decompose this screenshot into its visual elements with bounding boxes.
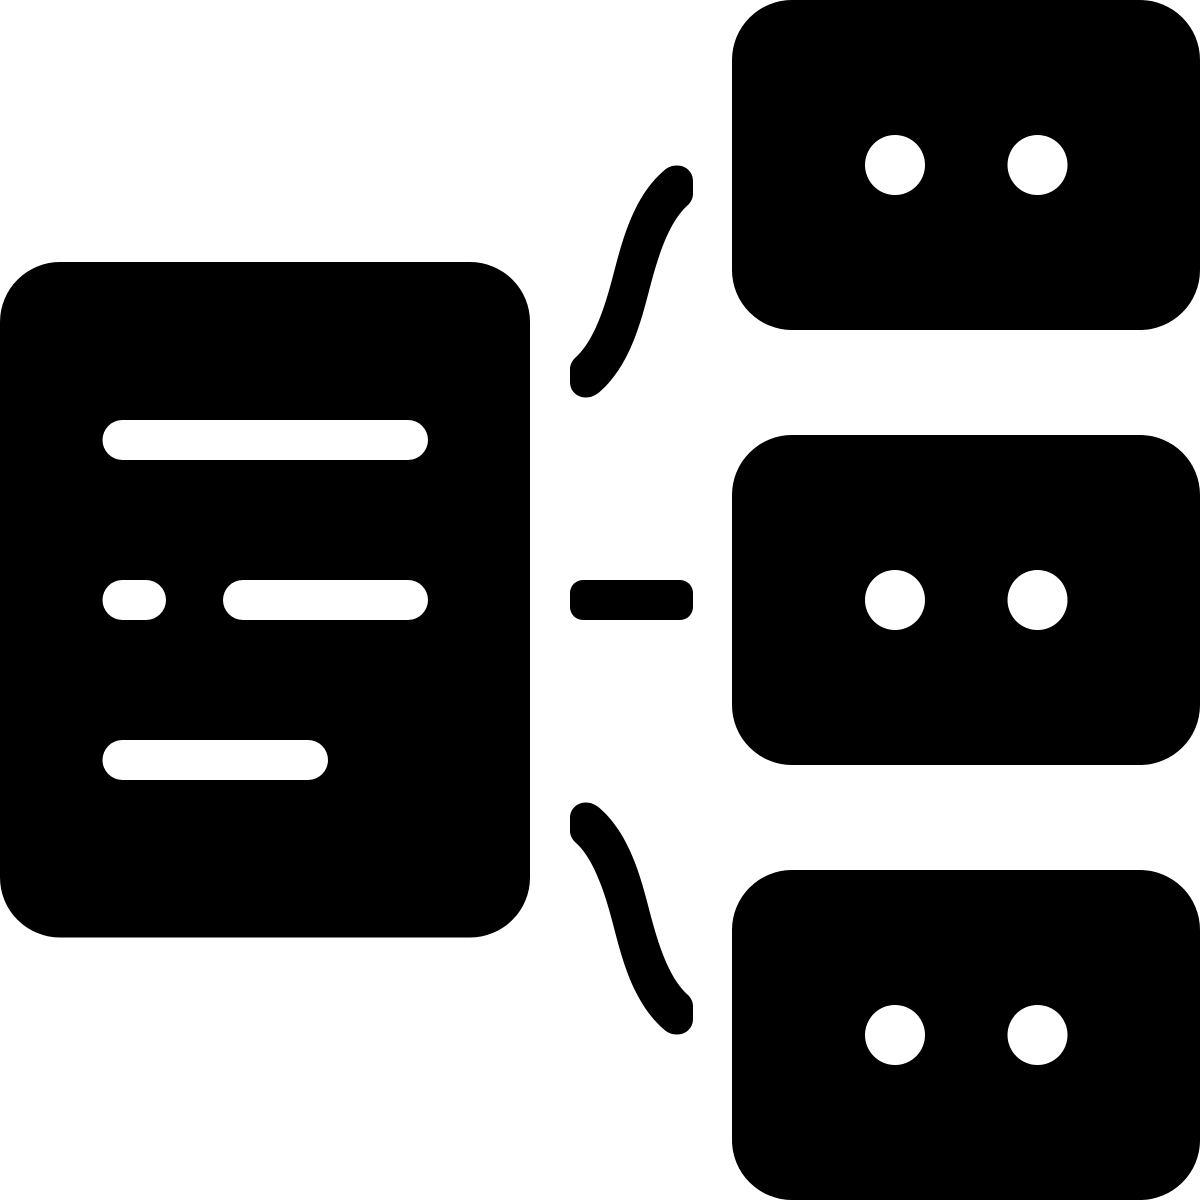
panel: bottom server box [732, 870, 1200, 1200]
panel: document [0, 262, 530, 938]
connector: upper curve [570, 166, 693, 398]
connector: middle line [570, 580, 693, 620]
panel: top server box [732, 0, 1200, 330]
connector: lower curve [570, 802, 693, 1034]
panel: middle server box [732, 435, 1200, 765]
